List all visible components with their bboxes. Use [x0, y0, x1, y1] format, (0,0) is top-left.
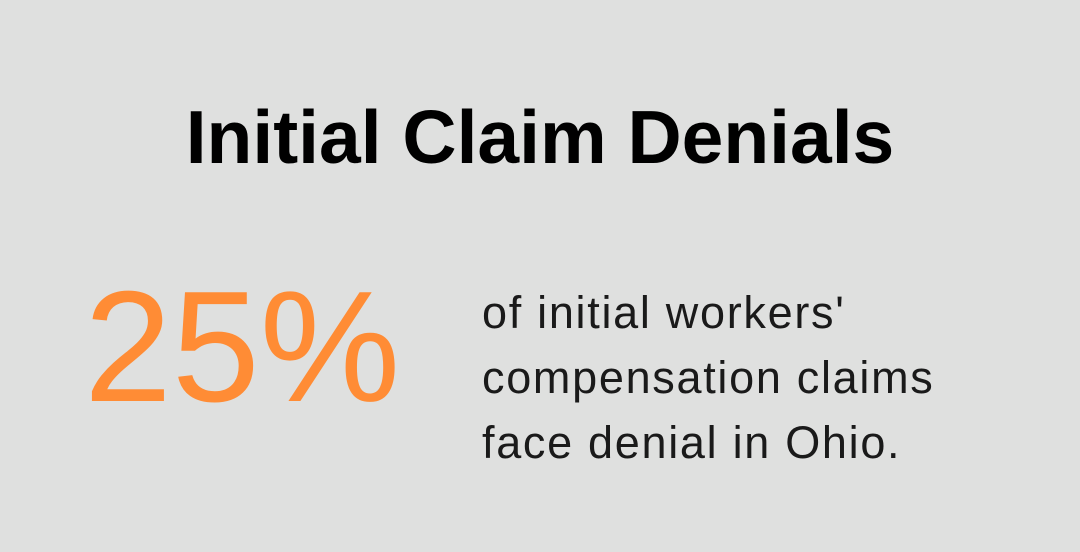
text block: description: of initial workers' — [482, 287, 846, 338]
text block: description: face denial in Ohio. — [482, 417, 901, 468]
text block: description: compensation claims — [482, 352, 934, 403]
title: Initial Claim Denials — [186, 95, 894, 179]
text block: description — [482, 287, 934, 468]
statistic: 25%: 25% — [84, 259, 400, 435]
